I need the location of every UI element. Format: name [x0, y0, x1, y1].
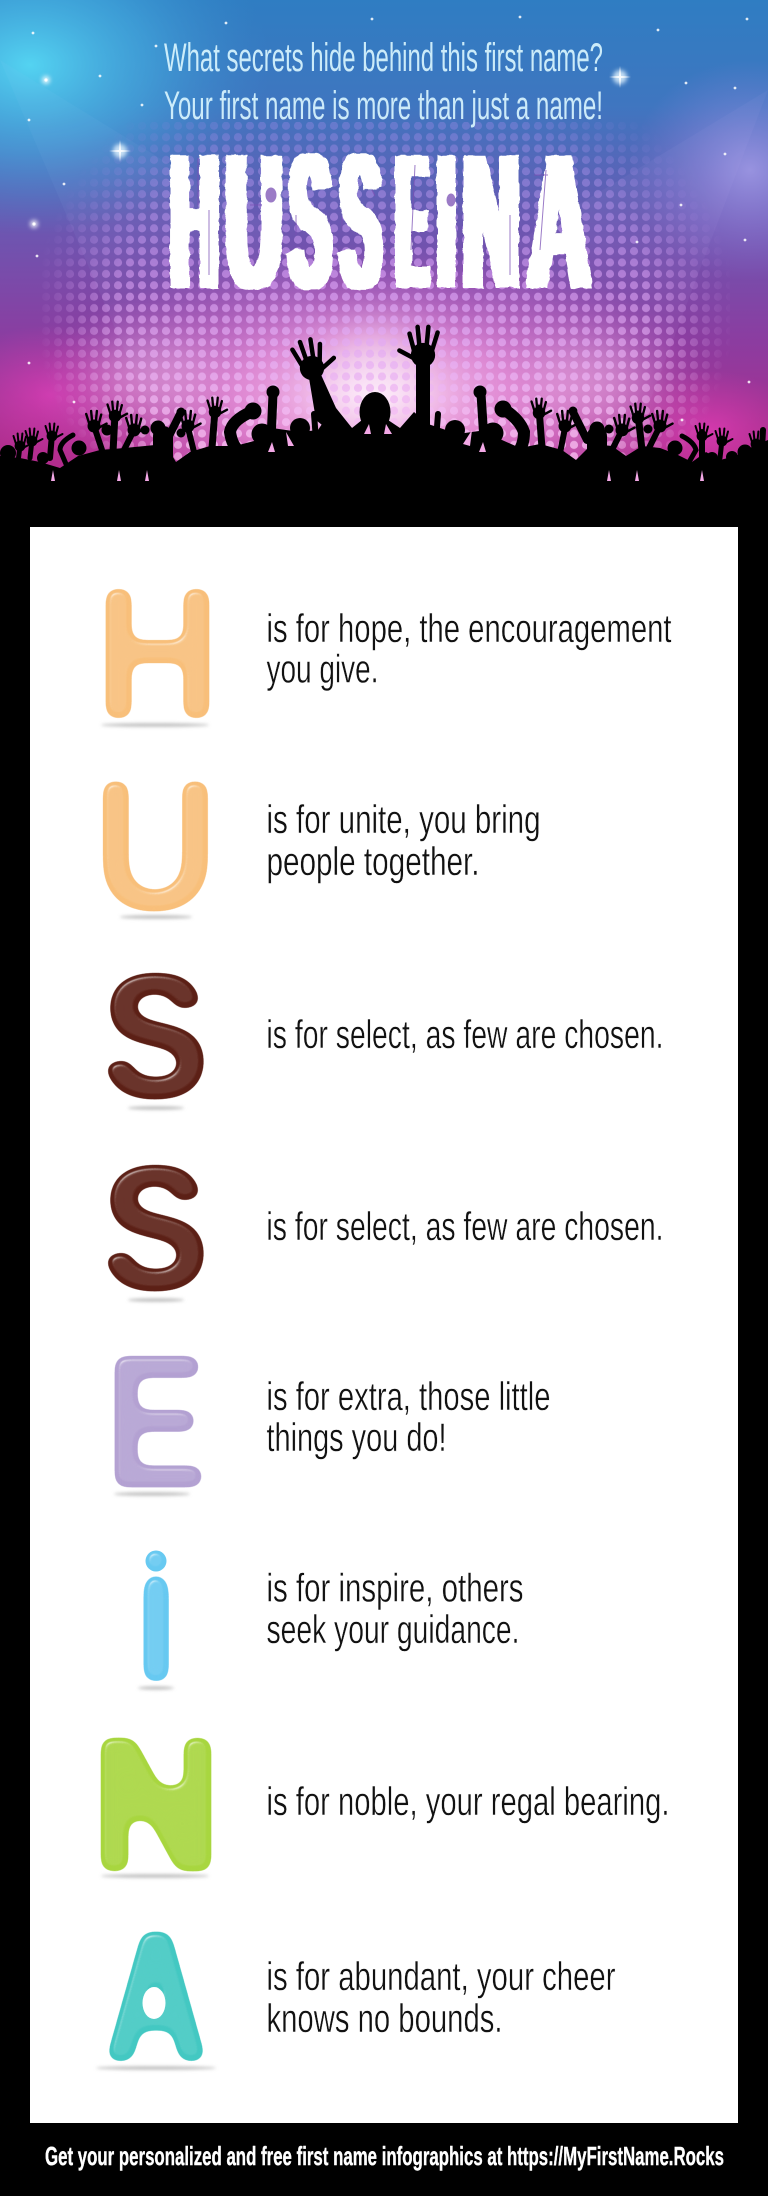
text: A — [528, 113, 590, 329]
shadow S — [128, 1106, 184, 1110]
tagline — [164, 36, 603, 128]
shadow H — [101, 723, 209, 727]
sparkle stars — [28, 16, 750, 421]
text A — [266, 1955, 616, 2041]
hero background: concert lights — [0, 0, 768, 545]
row S one — [102, 940, 664, 1133]
text H: you give. — [266, 648, 378, 692]
text i — [266, 1566, 524, 1652]
shadow S — [128, 1298, 184, 1302]
icon: letter i — [143, 1550, 169, 1681]
name title: N — [463, 113, 519, 329]
text H — [266, 607, 672, 692]
letter A counter — [142, 1987, 166, 2019]
crowd silhouette — [0, 327, 768, 530]
icon: letter N: N — [91, 1700, 221, 1909]
name title — [171, 113, 590, 329]
name title: H — [171, 113, 218, 329]
text E — [266, 1375, 550, 1460]
name title: S — [290, 113, 330, 329]
row E — [105, 1315, 550, 1528]
text E: things you do! — [266, 1416, 446, 1460]
name title: I — [438, 113, 455, 329]
icon: letter U: U — [93, 742, 218, 950]
row H — [94, 550, 672, 758]
icon: letter S: S — [102, 1132, 209, 1325]
shadow A — [96, 2066, 216, 2070]
shadow E — [114, 1492, 190, 1496]
text U — [266, 798, 540, 884]
white content panel — [30, 527, 738, 2123]
icon: letter A: A — [107, 1899, 205, 2095]
icon: letter E: E — [105, 1315, 208, 1528]
row N — [91, 1700, 670, 1909]
row A — [96, 1899, 616, 2095]
text i: seek your guidance. — [266, 1608, 520, 1652]
dot matrix light wall — [40, 122, 730, 482]
text A: knows no bounds. — [266, 1997, 502, 2041]
text U: people together. — [266, 840, 480, 884]
shadow U — [120, 915, 192, 919]
row U — [93, 742, 541, 950]
text U: is for unite, you bring — [266, 798, 540, 842]
icon: letter S: S — [102, 940, 209, 1133]
grunge scratches on title — [198, 158, 548, 275]
text i: is for inspire, others — [266, 1566, 524, 1610]
text A: is for abundant, your cheer — [266, 1955, 616, 1999]
row S two — [102, 1132, 664, 1325]
text E: is for extra, those little — [266, 1375, 550, 1419]
row I — [132, 1520, 524, 1719]
name title: E — [397, 113, 427, 329]
icon: letter H: H — [94, 550, 221, 758]
icon: letter i: i — [132, 1520, 181, 1719]
name title: U — [226, 113, 282, 329]
shadow i — [138, 1686, 174, 1690]
name title: S — [341, 113, 380, 329]
shadow N — [101, 1874, 209, 1878]
